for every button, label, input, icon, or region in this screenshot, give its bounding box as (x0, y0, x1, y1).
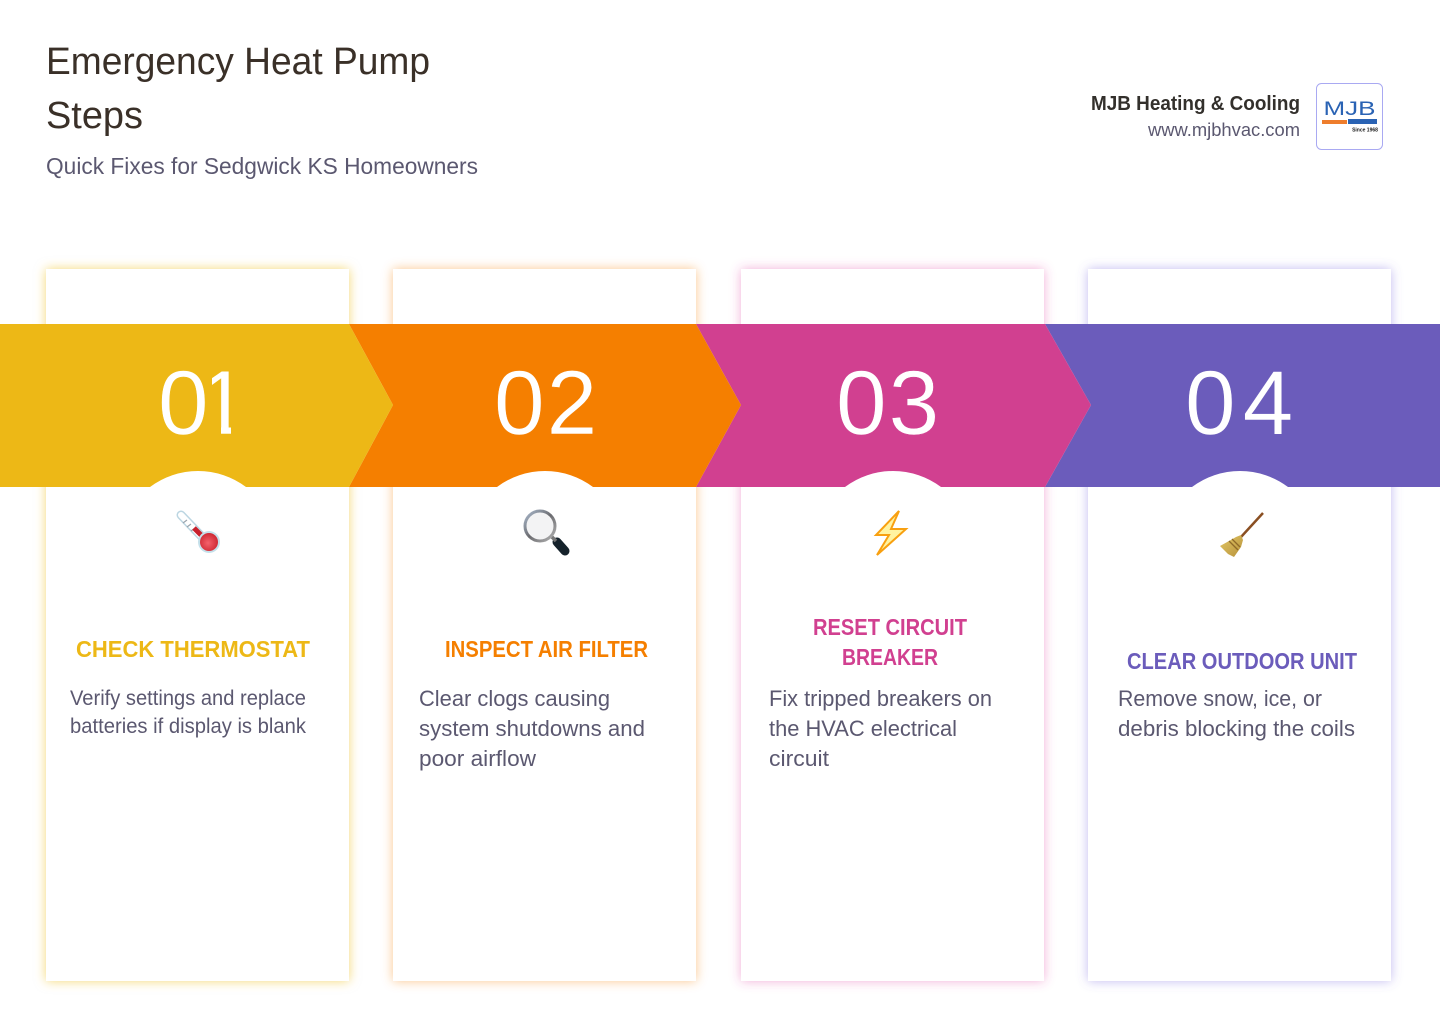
number 02: 02 (494, 353, 597, 454)
company name and website (1091, 93, 1300, 140)
step 4 description: Remove snow, ice, or (1118, 686, 1322, 711)
logo: MJB (1324, 99, 1376, 120)
panel: step 2 card (393, 269, 696, 981)
step 2 description: Clear clogs causing (419, 686, 610, 711)
number 01 (162, 370, 231, 435)
panel: step 3 card (741, 269, 1044, 981)
step 3 heading: BREAKER (842, 644, 938, 670)
icon: thermometer (181, 515, 220, 553)
title (46, 41, 430, 137)
icon circle notch 1 (150, 471, 246, 487)
company name and website: www.mjbhvac.com (1147, 120, 1300, 140)
title: Emergency Heat Pump (46, 41, 430, 83)
arrow band: step 1 (0, 324, 393, 487)
step 3 description: Fix tripped breakers on (769, 686, 992, 711)
step 4 description (1118, 686, 1355, 741)
number 04: 04 (1185, 353, 1293, 454)
icon circle notch 3 (845, 471, 941, 487)
number 03: 03 (836, 353, 939, 454)
logo (1316, 84, 1382, 150)
number 01: 1 (198, 353, 249, 454)
step 2 description (419, 686, 645, 771)
step 4 description: debris blocking the coils (1118, 716, 1355, 741)
logo: Since 1968 (1352, 128, 1378, 134)
step 2 description: poor airflow (419, 746, 536, 771)
title: Steps (46, 95, 143, 137)
arrow band: step 3 (696, 324, 1091, 487)
step 1 description: batteries if display is blank (70, 715, 306, 738)
arrow band: step 2 (349, 324, 741, 487)
panel: step 4 card (1088, 269, 1391, 981)
icon: lightning bolt (876, 511, 906, 555)
step 4 heading: CLEAR OUTDOOR UNIT (1127, 648, 1357, 674)
panel: step 1 card (46, 269, 349, 981)
step 3 heading (813, 614, 967, 670)
step 2 description: system shutdowns and (419, 716, 645, 741)
step 3 description: circuit (769, 746, 829, 771)
step 3 heading: RESET CIRCUIT (813, 614, 967, 640)
icon: broom (1220, 513, 1263, 557)
arrow band: step 4 (1045, 324, 1440, 487)
icon circle notch 2 (497, 471, 593, 487)
step 3 description (769, 686, 992, 771)
step 1 description (70, 687, 306, 738)
step 1 description: Verify settings and replace (70, 687, 306, 710)
icon circle notch 4 (1192, 471, 1288, 487)
subtitle: Quick Fixes for Sedgwick KS Homeowners (46, 153, 478, 179)
company name and website: MJB Heating & Cooling (1091, 93, 1300, 115)
number 01: 0 (158, 353, 209, 454)
step 1 heading: CHECK THERMOSTAT (76, 636, 310, 662)
icon: magnifying glass (525, 511, 565, 551)
step 3 description: the HVAC electrical (769, 716, 957, 741)
step 2 heading: INSPECT AIR FILTER (445, 636, 648, 662)
